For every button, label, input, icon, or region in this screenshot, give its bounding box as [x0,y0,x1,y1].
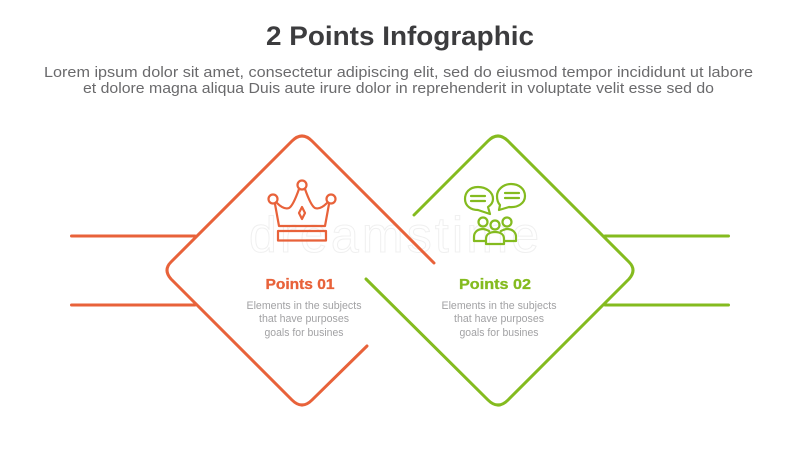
watermark: dreamstime [249,207,539,263]
title: 2 Points Infographic [266,21,534,51]
body text: points 02: that have purposes [454,313,544,325]
body text: points 02 [442,300,557,339]
subtitle text [44,64,753,97]
panel: point 01 [72,136,434,405]
body text: points 01: goals for busines [264,327,344,339]
subtitle text: Lorem ipsum dolor sit amet, consectetur adipiscing elit, sed do eiusmod tempor incididunt ut labore [44,64,753,81]
diamond outline: point 02 [366,136,633,405]
diamond outline: point 01 [167,136,434,405]
body text: points 01: that have purposes [259,313,349,325]
heading: points 02: Points 02 [459,276,531,293]
heading: points 01: Points 01 [266,276,334,293]
body text: points 01: Elements in the subjects [246,300,362,312]
body text: points 02: Elements in the subjects [442,300,557,312]
body text: points 02: goals for busines [460,327,539,339]
connector lines: point 02 [605,236,728,305]
icon: crown [268,180,336,240]
subtitle text: et dolore magna aliqua Duis aute irure dolor in reprehenderit in voluptate velit esse sed do [83,80,714,97]
icon: discussion group [465,184,525,244]
panel: point 02 [366,136,728,405]
body text: points 01 [246,300,362,339]
connector lines: point 01 [72,236,195,305]
